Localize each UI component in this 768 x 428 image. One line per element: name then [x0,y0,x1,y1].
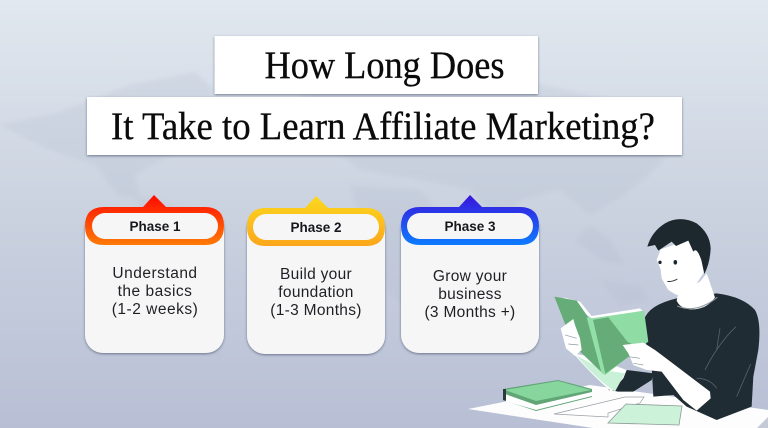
phase 2 label [253,214,379,240]
finger lines [565,335,643,365]
phase 1 header band [85,195,224,245]
title box: first line [214,36,538,94]
phase 1 label [92,213,218,239]
neck [677,273,715,309]
phase 2 header band [247,196,385,246]
lit sleeve [577,356,625,392]
desk [468,385,768,428]
world map silhouette [0,72,680,360]
phase 2 description: Build your [280,266,352,283]
phase 1 description: Understand [112,265,198,282]
phase 1 description: the basics [118,283,192,300]
book [563,297,643,318]
hair [647,219,711,274]
panel: phase 3 [401,195,539,353]
sweater [644,293,759,420]
illustration: man reading at desk [468,219,768,428]
left hand [561,319,582,356]
title box: second line: It Take to Learn Affiliate Marketing? [111,105,655,148]
phase 2 description: (1-3 Months) [270,302,362,319]
title [87,36,682,155]
phase 1 label: Phase 1 [129,219,181,234]
face [657,240,706,295]
title box: first line: How Long Does [264,44,504,87]
phase 2 label: Phase 2 [290,220,342,235]
sweater folds [697,327,751,397]
person [554,219,759,420]
collar [677,297,717,309]
desk corner shadow [757,417,768,428]
paper sheet [554,397,644,417]
panel: phase 2 [247,196,385,354]
right hand and forearm [623,343,711,411]
phase 3 label: Phase 3 [444,219,496,234]
phase 2 description: foundation [278,284,354,301]
phase 3 description: Grow your [433,268,507,285]
phase 3 description: business [438,286,502,303]
phase 1 description: (1-2 weeks) [112,301,198,318]
left sleeve [608,370,653,392]
phase 3 header band [401,195,539,245]
phase 3 label [407,213,533,239]
panel: phase 1 [85,195,224,353]
left arm [573,353,627,392]
green sheet [608,404,682,425]
phase 3 description: (3 Months +) [424,304,516,321]
book stack on desk [503,380,592,411]
eyes [658,260,677,265]
mouth [667,279,677,281]
